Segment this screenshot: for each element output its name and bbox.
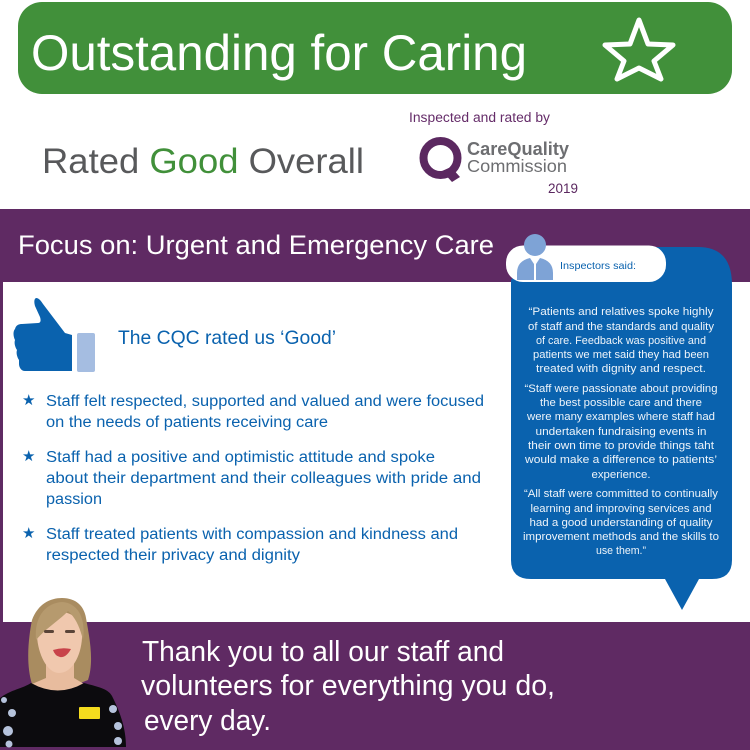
quote 2: the best possible care and there — [540, 397, 702, 409]
sleeve embroidery — [1, 697, 122, 748]
bullet 3: ★ — [22, 525, 35, 542]
icon: star — [605, 20, 673, 79]
fringe — [36, 602, 84, 640]
icon: thumbs up — [14, 298, 95, 372]
title: Outstanding for Caring — [31, 25, 527, 81]
bullet 1: ★ — [22, 392, 35, 409]
bullet 2 — [22, 448, 481, 508]
quote 1 — [528, 306, 715, 375]
speech bubble: inspectors said — [506, 234, 732, 610]
quote 2: undertaken fundraising events in — [536, 426, 706, 438]
bullet 1: Staff felt respected, supported and valued and were focused — [46, 393, 484, 410]
bullet list — [22, 392, 484, 564]
bullet 2: passion — [46, 491, 102, 508]
bullet 2: Staff had a positive and optimistic attitude and spoke — [46, 449, 435, 466]
black top — [0, 683, 126, 747]
quote 3: learning and improving services and — [530, 503, 712, 515]
inspector quotes — [523, 306, 719, 557]
quote 1: “Patients and relatives spoke highly — [528, 306, 714, 318]
logo wordmark: CareQuality — [467, 139, 569, 159]
bullet 2: about their department and their colleagues with pride and — [46, 470, 481, 487]
quote 2: would make a difference to patients’ — [524, 454, 717, 466]
quote 2: were many examples where staff had — [526, 411, 715, 423]
quote 1: of staff and the standards and quality — [528, 321, 715, 333]
quote 3 — [523, 488, 719, 557]
inspectors said text: Inspectors said: — [560, 260, 636, 272]
eyes — [44, 630, 75, 633]
bullet 3: respected their privacy and dignity — [46, 547, 300, 564]
quote 3: had a good understanding of quality — [530, 517, 713, 529]
bullet 1 — [22, 392, 484, 431]
quote 3: use them.” — [596, 545, 646, 557]
icon: CQC Q logo — [424, 141, 460, 182]
bullet 2: ★ — [22, 448, 35, 465]
thank you message: volunteers for everything you do, — [141, 670, 555, 702]
overall rating heading: Rated Good Overall — [42, 142, 364, 181]
thank you message: Thank you to all our staff and — [142, 636, 504, 668]
inspected by label: Inspected and rated by — [409, 110, 550, 125]
photo: smiling staff member — [0, 598, 126, 748]
bullet 3: Staff treated patients with compassion and kindness and — [46, 526, 458, 543]
quote 3: “All staff were committed to continually — [524, 488, 719, 500]
panel: purple background — [0, 209, 750, 750]
logo wordmark second line: Commission — [467, 156, 567, 176]
quote 3: improvement methods and the skills to — [523, 531, 719, 543]
name badge — [79, 707, 100, 719]
quote 1: of care. Feedback was positive and — [536, 335, 706, 347]
bullet 1: on the needs of patients receiving care — [46, 414, 328, 431]
face — [37, 612, 82, 673]
rating heading: The CQC rated us ‘Good’ — [118, 327, 336, 349]
bubble label — [506, 234, 666, 282]
section heading: Focus on: Urgent and Emergency Care — [18, 230, 494, 260]
hair — [28, 598, 91, 686]
bullet 3 — [22, 525, 458, 564]
thank you message: every day. — [144, 705, 271, 737]
quote 2: their own time to provide things taht — [528, 440, 714, 452]
quote 2 — [524, 383, 718, 481]
CQC logo block — [409, 110, 578, 196]
thank you message — [141, 636, 555, 737]
quote 1: treated with dignity and respect. — [536, 363, 706, 375]
neck and chest — [32, 662, 84, 692]
quote 2: “Staff were passionate about providing — [524, 383, 718, 395]
quote 2: experience. — [592, 469, 650, 481]
quote 1: patients we met said they had been — [533, 349, 709, 361]
icon: inspector person — [517, 234, 553, 280]
smile — [53, 648, 71, 657]
year: 2019 — [548, 181, 578, 196]
title banner — [18, 2, 732, 94]
panel: white content area — [3, 282, 750, 622]
